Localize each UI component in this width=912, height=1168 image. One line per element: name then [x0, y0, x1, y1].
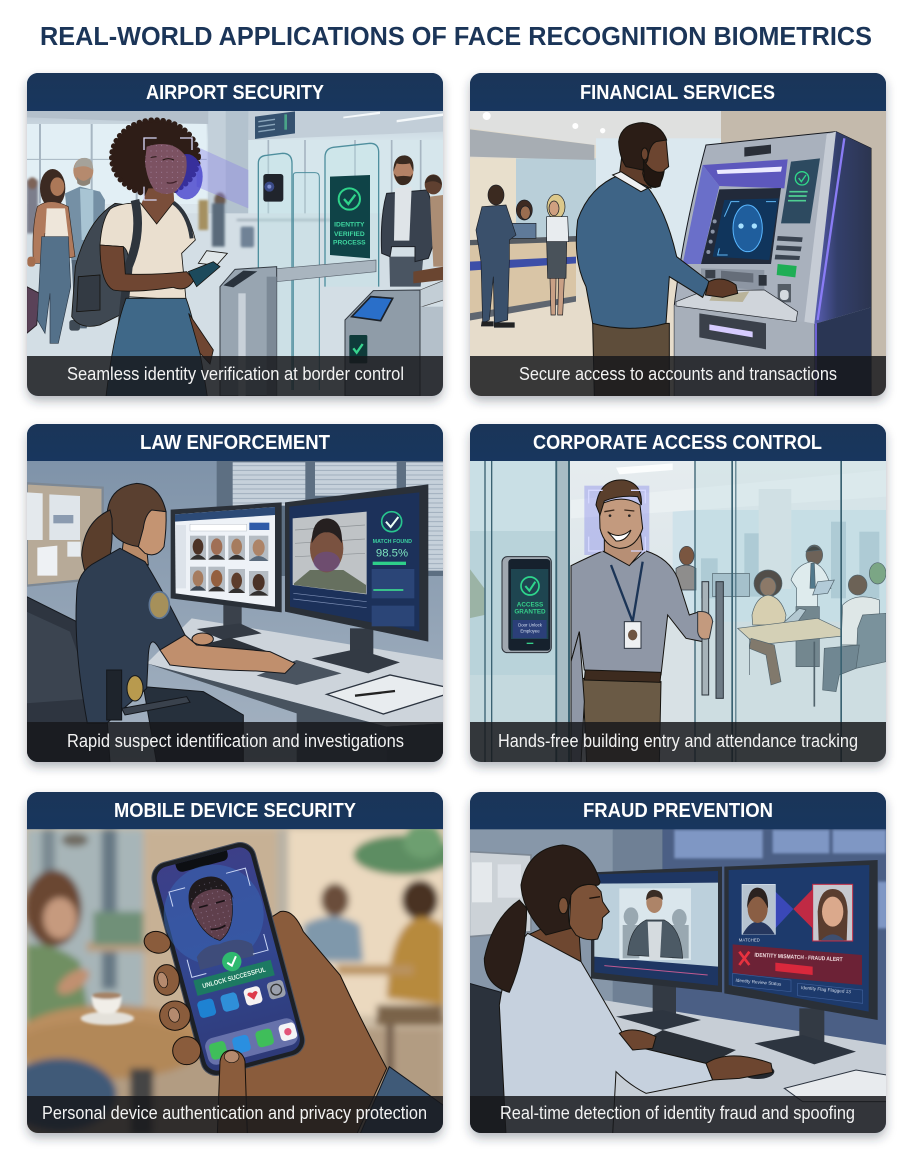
bank staff and customer: [476, 185, 569, 327]
bulletin board: [27, 483, 103, 586]
heading: airport security: [27, 73, 443, 111]
wall board: [469, 852, 531, 937]
heading: financial services: FINANCIAL SERVICES: [580, 82, 775, 104]
illustration: analyst reviewing alerts: [469, 829, 888, 1134]
monitor: fraud alert: Identity Flag Flagged 13: [801, 985, 852, 994]
ATM: [674, 132, 871, 397]
phone: app icons: [193, 979, 300, 1067]
illustration: airport gates: [27, 111, 443, 398]
keyboard, mouse and papers: [633, 1030, 887, 1102]
caption: financial services: [470, 356, 886, 396]
background office workers: [676, 545, 886, 707]
caption: law enforcement: Rapid suspect identification and investigations: [67, 731, 404, 751]
heading: corporate access control: CORPORATE ACCESS CONTROL: [533, 432, 822, 454]
panel: mobile device security: [3, 792, 453, 1135]
access control terminal: [502, 557, 551, 653]
camera: [263, 174, 283, 202]
traveller: [72, 120, 227, 397]
caption: airport security: Seamless identity verification at border control: [67, 364, 404, 384]
monitor: video feed: [591, 867, 722, 1030]
monitor: fraud alert: [724, 860, 878, 1064]
right turnstile: [345, 281, 443, 397]
phone: face scan: [168, 866, 270, 977]
monitor: match result: [285, 484, 428, 673]
panel: corporate access control: [469, 424, 888, 765]
identity verified display: VERIFIED: [334, 231, 365, 238]
blurred café background: [3, 825, 453, 1135]
caption: financial services: Secure access to accounts and transactions: [519, 364, 837, 384]
heading: airport security: AIRPORT SECURITY: [146, 82, 325, 104]
monitor: fraud alert: MATCHED: [739, 938, 760, 943]
phone: unlock banner: UNLOCK SUCCESSFUL: [202, 966, 267, 990]
left turnstile: [220, 260, 376, 397]
face scan glow: [584, 486, 649, 555]
bank counter: [469, 236, 576, 321]
heading: mobile device security: [27, 792, 443, 829]
glass partition frames: [484, 461, 887, 763]
heading: fraud prevention: [470, 792, 886, 829]
scan beam: [197, 147, 248, 208]
identity verified display: PROCESS: [333, 240, 366, 247]
panel: fraud prevention: [469, 792, 888, 1134]
man with grey hair: [65, 158, 105, 331]
sign: [255, 111, 295, 139]
woman with suitcase: [27, 169, 75, 343]
phone: [148, 839, 308, 1079]
panel: law enforcement: [27, 424, 444, 763]
caption: law enforcement: [27, 722, 443, 762]
analyst: [484, 845, 773, 1134]
identity verified display: IDENTITY: [334, 222, 365, 229]
person far right: [425, 174, 443, 267]
sleeve: [360, 1067, 444, 1134]
illustration: glass office door: [469, 461, 888, 765]
customer at ATM: [576, 123, 738, 397]
illustration: ATM in a bank: [469, 111, 888, 397]
coffee cup: [81, 992, 134, 1025]
man in suit: [381, 155, 443, 287]
face scan frame: [589, 490, 645, 551]
heading: law enforcement: LAW ENFORCEMENT: [140, 432, 330, 454]
monitor: match result: 98.5%: [376, 547, 408, 559]
fingers: [142, 929, 247, 1134]
monitor: suspect database: [171, 502, 282, 640]
access control terminal: Employee: [520, 628, 540, 633]
caption: airport security: [27, 356, 443, 396]
door handle: [698, 582, 723, 698]
employee: [571, 480, 713, 763]
police officer: [76, 483, 295, 763]
access control terminal: ACCESS: [517, 602, 543, 609]
finger nails: [156, 971, 239, 1063]
heading: law enforcement: [27, 424, 443, 461]
caption: fraud prevention: Real-time detection of identity fraud and spoofing: [500, 1103, 855, 1123]
monitor: fraud alert: Identity Review Status: [735, 978, 782, 987]
caption: mobile device security: Personal device authentication and privacy protection: [42, 1103, 427, 1123]
panel: financial services: [469, 73, 888, 397]
hand: [223, 911, 387, 1134]
heading: financial services: [470, 73, 886, 111]
panel: airport security: [27, 73, 443, 398]
illustration: phone unlock in a café: [3, 825, 453, 1135]
caption: corporate access control: Hands-free building entry and attendance tracking: [498, 731, 858, 751]
desk: [603, 1000, 887, 1134]
title: REAL-WORLD APPLICATIONS OF FACE RECOGNITION BIOMETRICS: [40, 23, 872, 51]
access control terminal: GRANTED: [514, 609, 546, 616]
heading: fraud prevention: FRAUD PREVENTION: [583, 800, 773, 822]
identity verified display: [330, 175, 370, 258]
desk: [147, 618, 444, 763]
chair: [27, 597, 110, 763]
caption: fraud prevention: [470, 1096, 886, 1133]
monitor: match result: MATCH FOUND: [373, 539, 412, 545]
caption: corporate access control: [470, 722, 886, 762]
illustration: officer at workstation: [27, 461, 444, 763]
keyboard, mouse pad, clipboard: [195, 638, 444, 714]
glass gates: [258, 143, 379, 390]
phone: unlock banner: [189, 942, 275, 996]
heading: corporate access control: [470, 424, 886, 461]
monitor: fraud alert: IDENTITY MISMATCH - FRAUD ALERT: [754, 953, 843, 963]
access control terminal: Door Unlock: [518, 622, 543, 627]
caption: mobile device security: [27, 1096, 443, 1133]
chair: [469, 983, 573, 1134]
heading: mobile device security: MOBILE DEVICE SECURITY: [114, 800, 357, 822]
face scan brackets: [144, 138, 192, 200]
